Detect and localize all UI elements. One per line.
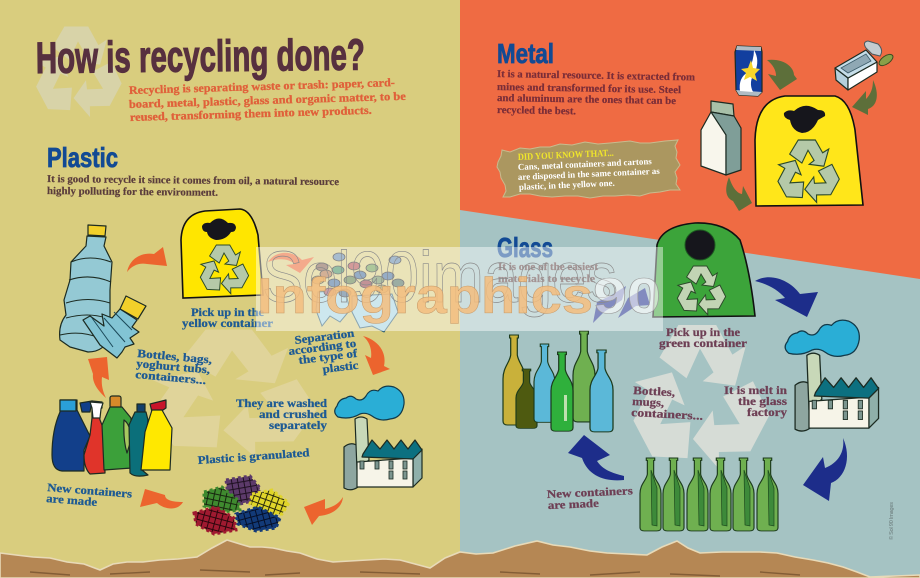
icon: sardine tin [835, 41, 895, 90]
metal description [497, 69, 695, 117]
caption: separation: the type of [298, 348, 358, 367]
callout: did you know: Cans, metal containers and cartons [518, 156, 652, 172]
intro text: Recycling is separating waste or trash: paper, card- [129, 77, 395, 97]
panel: metal [497, 38, 895, 211]
panel: plastic [46, 142, 422, 534]
caption: new containers are made: New containers [547, 485, 634, 501]
caption: pick up in yellow container [182, 307, 273, 330]
plastic description [47, 174, 339, 199]
icon: group of glass bottles [503, 331, 613, 432]
title: How is recycling done? [36, 31, 365, 83]
icon: plastic containers [52, 396, 172, 476]
caption: washed and crushed [236, 398, 328, 432]
glass description: materials to recycle [498, 274, 595, 285]
background recycling symbol: glass [619, 325, 779, 480]
caption: pick up in yellow container: Pick up in the [191, 307, 264, 319]
arrows: bottles to green container [593, 286, 650, 323]
icon: plastic granules [194, 476, 289, 534]
intro text: board, metal, plastic, glass and organic matter, to be [129, 91, 406, 111]
caption: bottles, bags, yoghurt tubs [135, 348, 213, 387]
plastic description: highly polluting for the environment. [47, 186, 218, 199]
copyright: © Sol 90 Images [888, 502, 895, 540]
metal description: It is a natural resource. It is extracted from [497, 69, 695, 83]
arrow: factory to granules [304, 497, 343, 525]
caption: melt in the glass factory: It is melt in [724, 385, 788, 397]
callout: did you know: DID YOU KNOW THAT... [518, 149, 614, 163]
caption: melt in the glass factory: factory [747, 407, 787, 419]
caption: pick up in green container [659, 327, 747, 350]
icon: green container [653, 223, 755, 318]
callout: did you know: are disposed in the same container as [518, 166, 660, 182]
arrow: granules to new containers [140, 489, 183, 508]
callout: did you know [497, 140, 680, 198]
plastic description: It is good to recycle it since it comes from oil, a natural resource [47, 174, 339, 188]
arrow: container to separation [268, 253, 314, 273]
panel: plastic background [0, 0, 460, 578]
icon: carton [701, 101, 741, 175]
caption: washed and crushed: They are washed [236, 398, 328, 410]
heading: metal: Metal [497, 38, 554, 69]
heading: glass: Glass [497, 232, 553, 263]
caption: melt in the glass factory: the glass [738, 396, 788, 408]
caption: new containers are made: are made [548, 498, 599, 512]
panel: glass background [460, 210, 920, 578]
torn cardboard strip [0, 540, 920, 578]
arrow: green container to factory [755, 277, 818, 317]
panel: metal background [460, 0, 920, 290]
caption: separation: Separation [294, 328, 356, 347]
caption: pick up in green container: green container [659, 338, 747, 350]
background recycling symbol: plastic [133, 330, 328, 466]
caption: new containers are made [547, 485, 634, 512]
watermark: Infographics [257, 268, 593, 324]
icon: glass factory [785, 320, 879, 431]
caption: bottles, mugs, containers: mugs, [632, 396, 665, 410]
caption: new containers are made: New containers [47, 482, 133, 501]
glass description: It is one of the easiest [498, 262, 599, 273]
metal description: recycled the best. [497, 105, 577, 117]
caption: separation: according to [288, 338, 357, 358]
caption: bottles, mugs, containers: containers... [631, 407, 704, 423]
caption: melt in the glass factory [724, 385, 788, 419]
arrow: separation to washing [363, 336, 390, 375]
caption: new containers are made: are made [46, 493, 98, 509]
intro text: reused, transforming them into new products. [130, 105, 372, 124]
arrow: tin to yellow container [852, 80, 877, 115]
caption: pick up in green container: Pick up in the [666, 327, 740, 339]
caption: bottles, mugs, containers: Bottles, [633, 385, 676, 399]
arrow: new containers to bottles [88, 357, 109, 398]
icon: yellow container [181, 209, 263, 298]
icon: sorted plastics pile [312, 253, 404, 332]
icon: plastic bottles [60, 225, 146, 358]
icon: row of new green bottles [640, 458, 778, 531]
callout: did you know: plastic, in the yellow one. [519, 178, 615, 192]
caption: plastic is granulated: Plastic is granulated [197, 447, 311, 467]
metal description: and aluminum are the ones that can be [497, 93, 676, 107]
arrow: new bottles to glass group [568, 435, 624, 480]
metal description: mines and transformed for its use. Steel [497, 82, 681, 96]
arrow: factory to new bottles [803, 438, 847, 501]
caption: bottles, bags, yoghurt tubs: containers... [135, 369, 207, 387]
intro text [129, 77, 406, 124]
panel: glass [497, 223, 895, 540]
icon: yellow container for metal [755, 96, 863, 207]
watermark: 90 [593, 268, 661, 324]
glass description [498, 262, 599, 285]
caption: pick up in yellow container: yellow container [182, 318, 273, 330]
icon: drink can [735, 46, 762, 96]
caption: separation [288, 328, 359, 376]
caption: separation: plastic [322, 360, 359, 376]
icon: plastic factory [335, 386, 422, 490]
caption: washed and crushed: separately [269, 420, 327, 432]
caption: bottles, bags, yoghurt tubs: Bottles, bags, [137, 348, 213, 367]
arrow: bottle to container [127, 247, 167, 272]
watermark: Sol90images [262, 238, 617, 318]
caption: bottles, bags, yoghurt tubs: yoghurt tubs, [136, 358, 211, 376]
caption: washed and crushed: and crushed [259, 409, 328, 421]
caption: new containers are made [46, 482, 133, 509]
arrow: can to yellow container [767, 60, 797, 90]
caption: bottles, mugs, containers [631, 385, 704, 423]
arrow: carton to yellow container [726, 177, 752, 211]
background recycling symbol: title [27, 26, 128, 124]
heading: plastic: Plastic [47, 142, 118, 173]
